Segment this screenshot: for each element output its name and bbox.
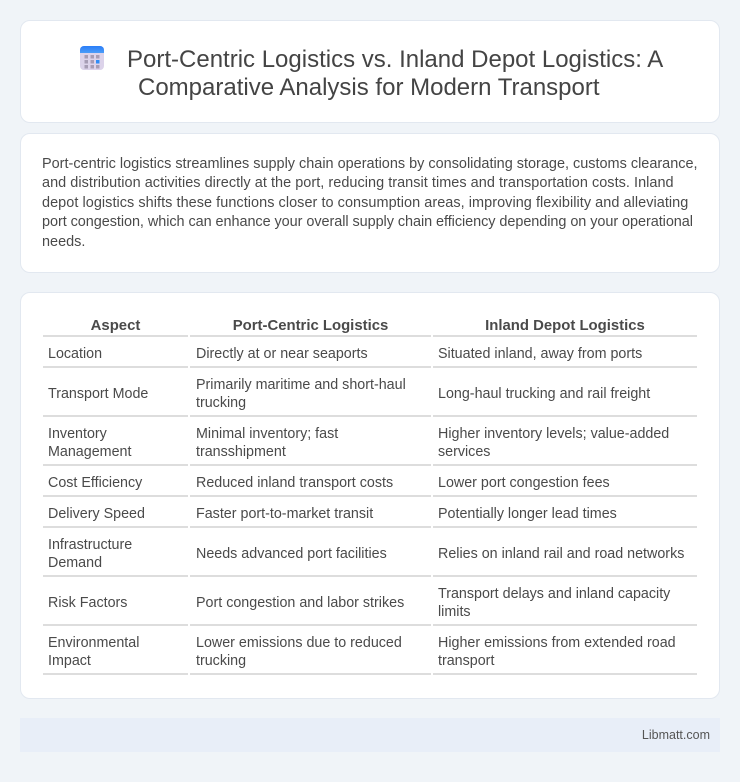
icon: calendar	[80, 46, 104, 70]
comparison table: Higher inventory levels; value-added	[438, 426, 669, 442]
comparison table: Reduced inland transport costs	[196, 474, 393, 490]
description text	[42, 156, 698, 250]
comparison table: Lower emissions due to reduced	[196, 634, 402, 650]
comparison table: trucking	[196, 394, 246, 410]
comparison table: Needs advanced port facilities	[196, 546, 387, 562]
comparison table: Potentially longer lead times	[438, 506, 617, 522]
comparison table: limits	[438, 604, 471, 620]
comparison table: Management	[48, 444, 131, 460]
comparison table: Impact	[48, 652, 91, 668]
comparison table: Higher emissions from extended road	[438, 634, 676, 650]
comparison table: Transport Mode	[48, 386, 148, 402]
panel: comparison table	[20, 292, 720, 699]
description text: and distribution activities directly at the port, reducing transit times and transportation costs. Inland	[42, 175, 674, 191]
comparison table: Primarily maritime and short-haul	[196, 376, 406, 392]
panel: title header	[20, 20, 720, 123]
comparison table: Relies on inland rail and road networks	[438, 546, 684, 562]
description text: port congestion, which can enhance your overall supply chain efficiency depending on your operational	[42, 214, 693, 230]
footer bar	[20, 718, 720, 752]
comparison table: Directly at or near seaports	[196, 346, 368, 362]
comparison table: transport	[438, 652, 494, 668]
comparison table: Location	[48, 346, 102, 362]
comparison table: Minimal inventory; fast	[196, 426, 338, 442]
comparison table: Risk Factors	[48, 594, 127, 610]
comparison table: services	[438, 444, 490, 460]
description text: Port-centric logistics streamlines supply chain operations by consolidating storage, customs clearance,	[42, 156, 698, 172]
comparison table: Cost Efficiency	[48, 474, 142, 490]
footer credit: Libmatt.com	[642, 728, 710, 742]
comparison table: Aspect	[91, 318, 140, 334]
comparison table: Port-Centric Logistics	[233, 318, 388, 334]
comparison table: Faster port-to-market transit	[196, 506, 373, 522]
comparison table: Demand	[48, 554, 102, 570]
comparison table: Long-haul trucking and rail freight	[438, 386, 650, 402]
comparison table: Situated inland, away from ports	[438, 346, 642, 362]
comparison table: Transport delays and inland capacity	[438, 586, 670, 602]
title line 1: Port-Centric Logistics vs. Inland Depot Logistics: A	[127, 46, 663, 73]
description text: needs.	[42, 234, 85, 250]
description text: depot logistics shifts these functions closer to consumption areas, improving flexibility and alleviating	[42, 195, 688, 211]
comparison table: trucking	[196, 652, 246, 668]
comparison table	[43, 318, 697, 675]
comparison table: Delivery Speed	[48, 506, 145, 522]
comparison table: Inland Depot Logistics	[485, 318, 645, 334]
comparison table: Inventory	[48, 426, 107, 442]
panel: description	[20, 133, 720, 273]
comparison table: Infrastructure	[48, 536, 132, 552]
comparison table: Environmental	[48, 634, 139, 650]
comparison table: transshipment	[196, 444, 286, 460]
title line 2: Comparative Analysis for Modern Transport	[138, 74, 600, 101]
comparison table: Port congestion and labor strikes	[196, 594, 404, 610]
comparison table: Lower port congestion fees	[438, 474, 610, 490]
